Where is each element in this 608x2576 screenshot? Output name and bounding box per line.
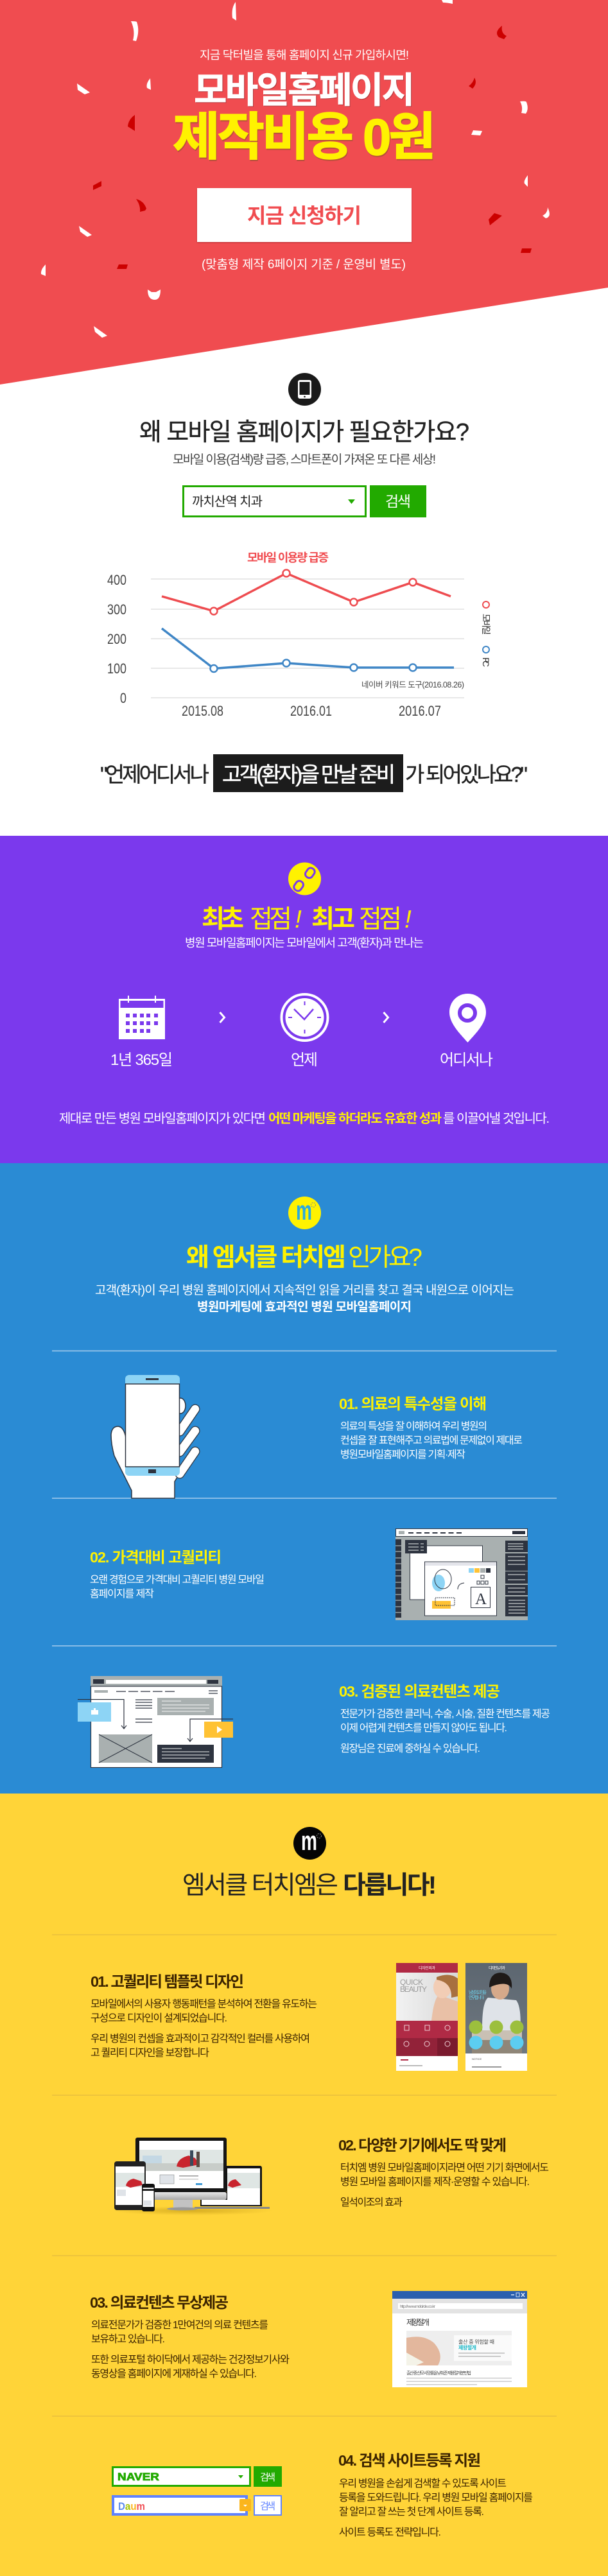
heading: ! bbox=[295, 906, 302, 933]
screenshot: dark template: 디자인뉴가과 bbox=[489, 1966, 505, 1971]
x axis labels: 2015.08 bbox=[182, 703, 223, 719]
item 03: 03. 의료컨텐츠 무상제공 bbox=[90, 2294, 229, 2311]
heading bbox=[182, 1872, 437, 1899]
icon: black m logo: m bbox=[301, 1826, 317, 1856]
quote: "언제어디서나 bbox=[100, 763, 209, 786]
chart title: 모바일 이용량 급증 bbox=[247, 551, 329, 564]
screenshot: dark template: 남성의 고민을 bbox=[469, 1989, 487, 1995]
closing statement bbox=[59, 1111, 550, 1126]
icon: calendar bbox=[119, 996, 165, 1039]
subheading: 모바일 이용(검색)량 급증, 스마트폰이 가져온 또 다른 세상! bbox=[173, 453, 436, 467]
x axis labels bbox=[182, 703, 441, 719]
confetti bbox=[41, 0, 550, 338]
item 01: 01. 의료의 특수성을 이해 bbox=[339, 1396, 487, 1412]
daum search: Daum bbox=[118, 2500, 145, 2512]
button: apply now: 지금 신청하기 bbox=[247, 204, 361, 227]
hero title highlight: 제작비용 0원 bbox=[173, 108, 436, 166]
item 03 bbox=[339, 1683, 550, 1754]
daum search: 검색 bbox=[260, 2501, 275, 2512]
search portals bbox=[113, 2466, 282, 2515]
screenshot: red template: BEAUTY bbox=[400, 1985, 427, 1994]
hero title: 모바일홈페이지 bbox=[194, 70, 415, 110]
icon labels: 1년 365일 bbox=[110, 1051, 173, 1069]
item 03: 동영상을 홈페이지에 게재하실 수 있습니다. bbox=[91, 2368, 257, 2380]
x axis labels: 2016.07 bbox=[399, 703, 441, 719]
item 01: 01. 고퀄리티 템플릿 디자인 bbox=[91, 1973, 244, 1990]
naver search: 검색 bbox=[260, 2472, 275, 2483]
item 02: 02. 가격대비 고퀄리티 bbox=[90, 1549, 221, 1566]
icon: clock bbox=[281, 994, 327, 1041]
item 02: 일석이조의 효과 bbox=[340, 2197, 403, 2208]
item 03: 보유하고 있습니다. bbox=[91, 2333, 165, 2345]
item 03: 전문가가 검증한 클리닉, 수술, 시술, 질환 컨텐츠를 제공 bbox=[340, 1708, 550, 1720]
item 03: 03. 검증된 의료컨텐츠 제공 bbox=[339, 1683, 500, 1700]
x axis labels: 2016.01 bbox=[290, 703, 332, 719]
y axis labels: 200 bbox=[107, 631, 126, 647]
icon labels: 어디서나 bbox=[440, 1051, 493, 1069]
icon: m logo bbox=[288, 1195, 321, 1229]
laptop bbox=[195, 2166, 270, 2209]
content screenshot: 제왕절개 bbox=[458, 2344, 476, 2351]
content screenshot: http://www.mdcircle.co.kr bbox=[400, 2304, 436, 2309]
heading: 엠서클 터치엠은 bbox=[182, 1872, 338, 1899]
hero footnote: (맞춤형 제작 6페이지 기준 / 운영비 별도) bbox=[202, 257, 406, 272]
item 03: 원장님은 진료에 중하실 수 있습니다. bbox=[340, 1743, 480, 1754]
intro text bbox=[95, 1283, 514, 1314]
line chart: mobile vs pc usage bbox=[107, 551, 491, 719]
legend bbox=[481, 601, 491, 667]
item 02: 02. 다양한 기기에서도 딱 맞게 bbox=[338, 2137, 507, 2154]
item 01 bbox=[91, 1973, 317, 2059]
item 02: 오랜 경험으로 가격대비 고퀄리티 병원 모바일 bbox=[90, 1574, 265, 1586]
icon labels bbox=[110, 1051, 493, 1069]
naver search bbox=[113, 2466, 282, 2487]
item 01 bbox=[339, 1396, 523, 1460]
button: apply now bbox=[197, 188, 412, 242]
search box: 까치산역 치과 bbox=[192, 494, 263, 509]
item 03 bbox=[90, 2294, 290, 2380]
screenshot: red template bbox=[396, 1963, 458, 2071]
illustration: hand holding phone bbox=[111, 1375, 196, 1498]
item 01: 컨셉을 잘 표현해주고 의료법에 문제없이 제대로 bbox=[340, 1435, 523, 1446]
heading: ! bbox=[404, 906, 412, 933]
item 01: 우리 병원의 컨셉을 효과적이고 감각적인 컬러를 사용하여 bbox=[91, 2033, 310, 2044]
content screenshot: 출산 중 산모 사망률을 낮춰 준 제왕절개 분만법 bbox=[406, 2370, 471, 2376]
item 01: 모바일에서의 사용자 행동패턴을 분석하여 전환을 유도하는 bbox=[91, 1998, 317, 2010]
item 04: 잘 알리고 잘 쓰는 첫 단계 사이트 등록. bbox=[339, 2506, 484, 2518]
item 01: 의료의 특성을 잘 이해하여 우리 병원의 bbox=[340, 1421, 487, 1432]
phone bbox=[142, 2184, 155, 2211]
item 04: 04. 검색 사이트등록 지원 bbox=[338, 2452, 481, 2469]
y axis labels bbox=[107, 572, 126, 706]
tablet bbox=[114, 2161, 146, 2210]
screenshot: red template: QUICK bbox=[400, 1978, 423, 1987]
panel: touchm is different bbox=[0, 1794, 608, 2576]
intro text: 고객(환자)이 우리 병원 홈페이지에서 지속적인 읽을 거리를 찾고 결국 내원으로 이어지는 bbox=[95, 1283, 514, 1297]
item 04: 우리 병원을 손쉽게 검색할 수 있도록 사이트 bbox=[339, 2478, 507, 2489]
y axis labels: 400 bbox=[107, 572, 126, 588]
icon: link bbox=[288, 863, 321, 895]
heading bbox=[202, 906, 412, 933]
screenshot: red template: 디자인외과 bbox=[419, 1966, 435, 1971]
item 04: 사이트 등록도 전략입니다. bbox=[339, 2527, 441, 2538]
icon: black m logo bbox=[293, 1826, 326, 1860]
item 02: 병원 모바일 홈페이지를 제작·운영할 수 있습니다. bbox=[340, 2176, 530, 2188]
daum search bbox=[113, 2496, 281, 2515]
heading: 최고 bbox=[311, 906, 355, 933]
arrow bbox=[384, 1012, 388, 1023]
icon: location pin bbox=[449, 994, 486, 1042]
icon labels: 언제 bbox=[291, 1051, 318, 1069]
series: pc bbox=[162, 628, 454, 672]
heading: 최초 bbox=[202, 906, 244, 933]
item 03: 이제 어렵게 컨텐츠를 만들지 않아도 됩니다. bbox=[340, 1722, 507, 1734]
y axis labels: 100 bbox=[107, 661, 126, 677]
item 02: 터치엠 병원 모바일홈페이지라면 어떤 기기 화면에서도 bbox=[340, 2162, 549, 2174]
subheading: 병원 모바일홈페이지는 모바일에서 고객(환자)과 만나는 bbox=[185, 937, 424, 949]
item 02 bbox=[90, 1549, 265, 1600]
quote: 고객(환자)을 만날 준비 bbox=[222, 763, 395, 786]
heading bbox=[186, 1244, 422, 1272]
y axis labels: 300 bbox=[107, 601, 126, 618]
heading: 다릅니다! bbox=[343, 1872, 437, 1899]
arrow bbox=[220, 1012, 225, 1023]
heading: 인가요? bbox=[348, 1244, 422, 1272]
content screenshot: 출산 중 위험할 때 bbox=[458, 2338, 494, 2345]
heading: 접점 bbox=[359, 906, 402, 933]
chart source note: 네이버 키워드 도구(2016.08.26) bbox=[361, 680, 464, 689]
content screenshot bbox=[392, 2291, 527, 2387]
panel: first and best contact bbox=[0, 836, 608, 1163]
series: mobile bbox=[162, 570, 451, 615]
item 02: 홈페이지를 제작 bbox=[90, 1588, 154, 1600]
illustration: responsive devices bbox=[112, 2138, 273, 2215]
y axis labels: 0 bbox=[120, 690, 126, 706]
screenshot: dark template: 연구합니다. bbox=[469, 1994, 485, 2000]
item 01: 병원모바일홈페이지를 기획·제작 bbox=[340, 1449, 465, 1460]
legend: 모바일 bbox=[481, 614, 491, 635]
search box: 검색 bbox=[385, 493, 411, 510]
illustration: design tool bbox=[395, 1529, 528, 1620]
item 04: 등록을 도와드립니다. 우리 병원 모바일 홈페이지를 bbox=[339, 2492, 533, 2503]
item 03: 의료전문가가 검증한 1만여건의 의료 컨텐츠를 bbox=[91, 2319, 268, 2331]
search box bbox=[184, 485, 426, 517]
illustration: design tool: A bbox=[475, 1591, 487, 1608]
mobile template screenshots bbox=[396, 1963, 527, 2071]
closing statement: 어떤 마케팅을 하더라도 유효한 성과 bbox=[268, 1111, 442, 1126]
item 01: 고 퀄리티 디자인을 보장합니다 bbox=[91, 2047, 209, 2059]
content screenshot: 제왕절개 bbox=[406, 2318, 430, 2327]
item 02 bbox=[338, 2137, 549, 2208]
closing statement: 제대로 만든 병원 모바일홈페이지가 있다면 bbox=[59, 1111, 266, 1126]
quote bbox=[100, 754, 528, 792]
panel: why mobile homepage bbox=[100, 373, 528, 792]
item 01: 구성으로 디자인이 설계되었습니다. bbox=[91, 2012, 227, 2024]
intro text: 병원마케팅에 효과적인 병원 모바일홈페이지 bbox=[197, 1300, 412, 1314]
heading: 왜 엠서클 터치엠 bbox=[186, 1244, 346, 1272]
item 03: 또한 의료포털 하이닥에서 제공하는 건강정보기사와 bbox=[91, 2354, 290, 2365]
monitor bbox=[135, 2138, 227, 2211]
panel: why emcircle touchm bbox=[0, 1163, 608, 1794]
item 04 bbox=[338, 2452, 533, 2538]
closing statement: 를 이끌어낼 것입니다. bbox=[443, 1111, 550, 1126]
quote: 가 되어있나요?" bbox=[405, 763, 528, 786]
heading: 왜 모바일 홈페이지가 필요한가요? bbox=[139, 419, 469, 446]
legend: PC bbox=[481, 657, 491, 667]
icon: m logo: m bbox=[296, 1195, 312, 1225]
screenshot: dark template bbox=[465, 1963, 527, 2071]
naver search: NAVER bbox=[117, 2471, 159, 2483]
heading: 접점 bbox=[250, 906, 292, 933]
illustration: web wireframe bbox=[78, 1676, 233, 1768]
hero eyebrow text: 지금 닥터빌을 통해 홈페이지 신규 가입하시면! bbox=[200, 49, 409, 62]
icon: phone bbox=[288, 373, 321, 406]
screenshot: dark template: NOTICE bbox=[472, 2057, 482, 2061]
